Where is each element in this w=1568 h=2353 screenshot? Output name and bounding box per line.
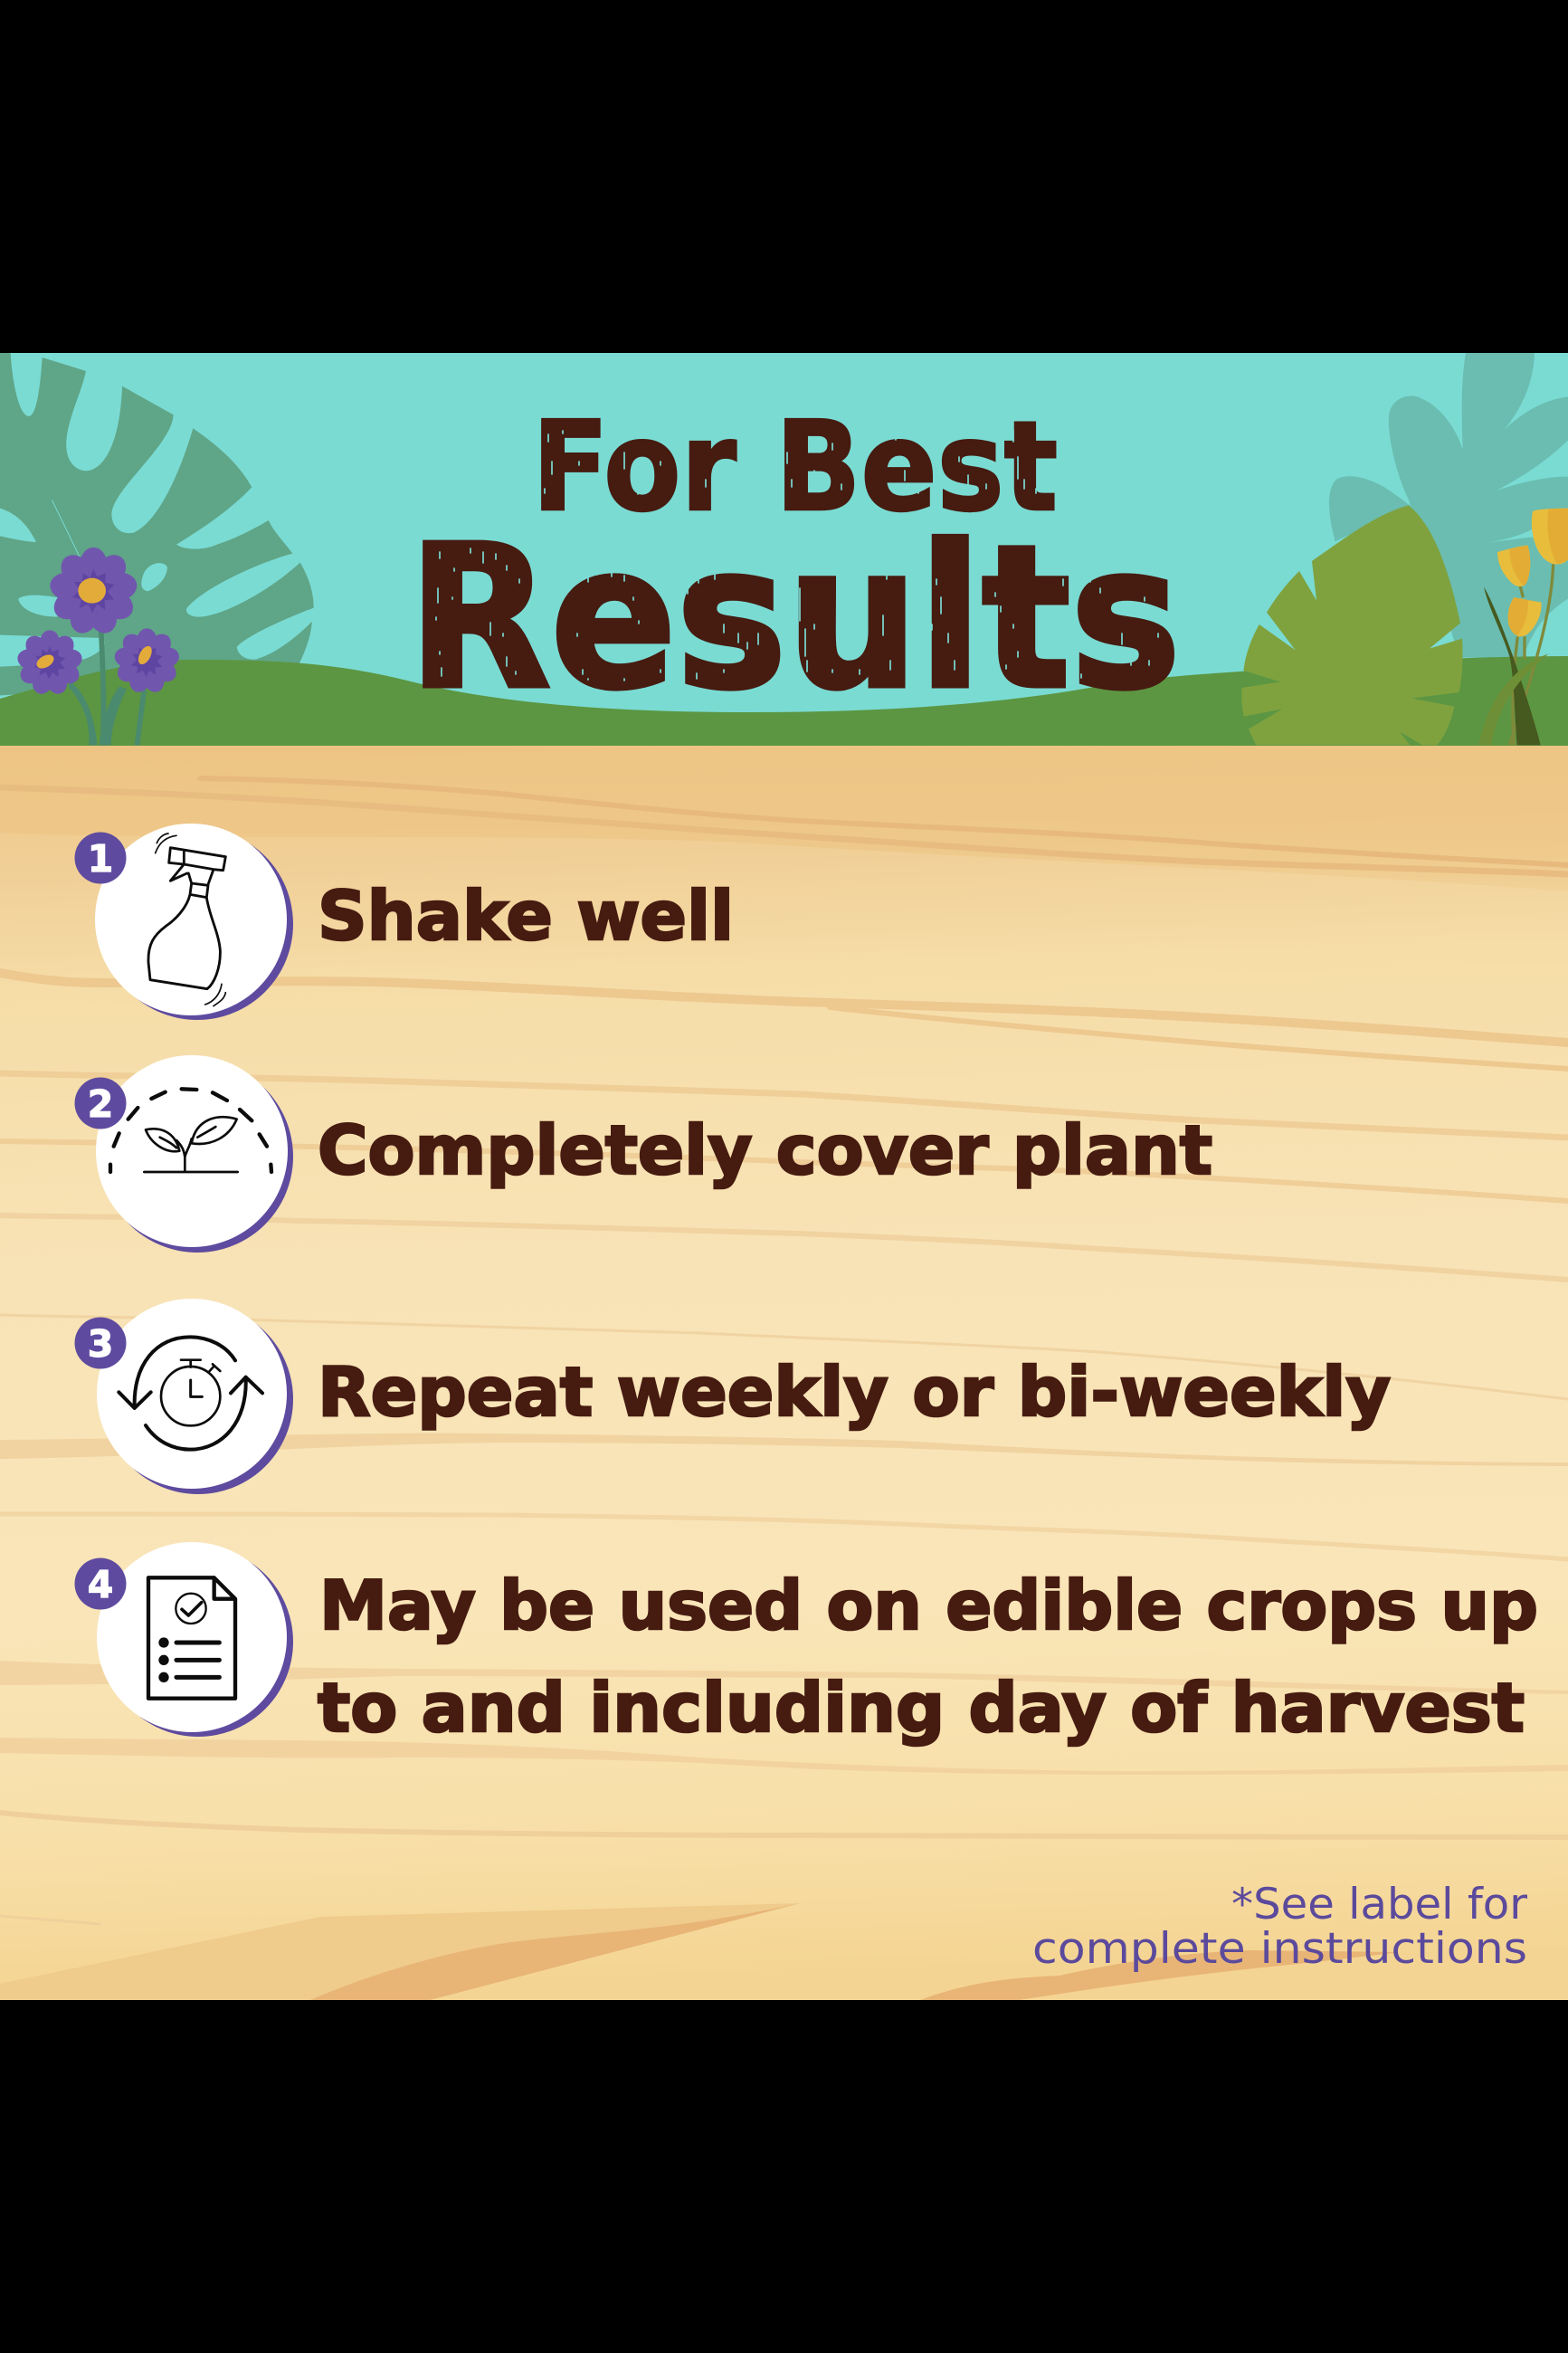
- teal leaf right: [1329, 353, 1568, 658]
- purple flowers left: [16, 548, 181, 745]
- sky: [0, 353, 1568, 746]
- number badge 3: [74, 1318, 127, 1368]
- step text 1: Shake well: [318, 876, 734, 956]
- footnote: *See label for: [1231, 1880, 1528, 1929]
- title line: Results: Results: [408, 504, 1181, 733]
- title line: For Best: For Best: [532, 395, 1058, 539]
- number badge 2: [74, 1077, 127, 1129]
- distressed texture specks: [436, 425, 1158, 681]
- number badge 1: [74, 833, 127, 883]
- title: [408, 395, 1181, 733]
- step 1: [74, 824, 734, 1020]
- black letterbox bottom: [0, 2000, 1568, 2353]
- number badge 4: 4: [88, 1563, 113, 1606]
- step text 4: [318, 1566, 1538, 1748]
- step text 3: Repeat weekly or bi-weekly: [318, 1352, 1391, 1432]
- badge circle shadow: [103, 1547, 293, 1737]
- bottom wedge dark right: [920, 1950, 1400, 2000]
- icon: spray bottle: [148, 834, 225, 1006]
- number badge 1: 1: [88, 837, 113, 881]
- header banner scene: [0, 353, 1568, 746]
- icon circle: [95, 824, 287, 1015]
- wood background panel: [0, 746, 1568, 2000]
- badge circle shadow: [103, 1304, 293, 1494]
- bottom wedge light: [0, 1903, 800, 2000]
- step 4: [74, 1542, 1538, 1748]
- footnote: complete instructions: [1032, 1924, 1527, 1974]
- badge circle shadow: [101, 1061, 293, 1253]
- wood base: [0, 746, 1568, 2000]
- green hill: [0, 656, 1568, 746]
- icon: checklist document: [148, 1577, 235, 1699]
- icon: plant under spray arc: [110, 1089, 271, 1172]
- step 2: [74, 1055, 1212, 1253]
- footnote: [1032, 1880, 1528, 1974]
- bottom wedge dark left: [310, 1903, 800, 2000]
- step text 2: Completely cover plant: [318, 1110, 1212, 1190]
- icon circle: [97, 1299, 287, 1489]
- step 3: [74, 1299, 1391, 1494]
- wood darker top band: [0, 746, 1568, 891]
- olive leaf and tulips right: [1241, 505, 1568, 745]
- number badge 2: 2: [88, 1082, 113, 1126]
- number badge 3: 3: [88, 1322, 113, 1366]
- wood grain streaks: [0, 778, 1568, 1924]
- icon circle: [96, 1055, 288, 1247]
- badge circle shadow: [101, 828, 293, 1020]
- monstera leaf left: [0, 353, 314, 695]
- icon: stopwatch with cycle arrows: [119, 1337, 262, 1450]
- step text 4: to and including day of harvest: [318, 1668, 1525, 1748]
- icon circle: [97, 1542, 287, 1732]
- black letterbox top: [0, 0, 1568, 353]
- number badge 4: [74, 1558, 127, 1609]
- step text 4: May be used on edible crops up: [319, 1566, 1538, 1645]
